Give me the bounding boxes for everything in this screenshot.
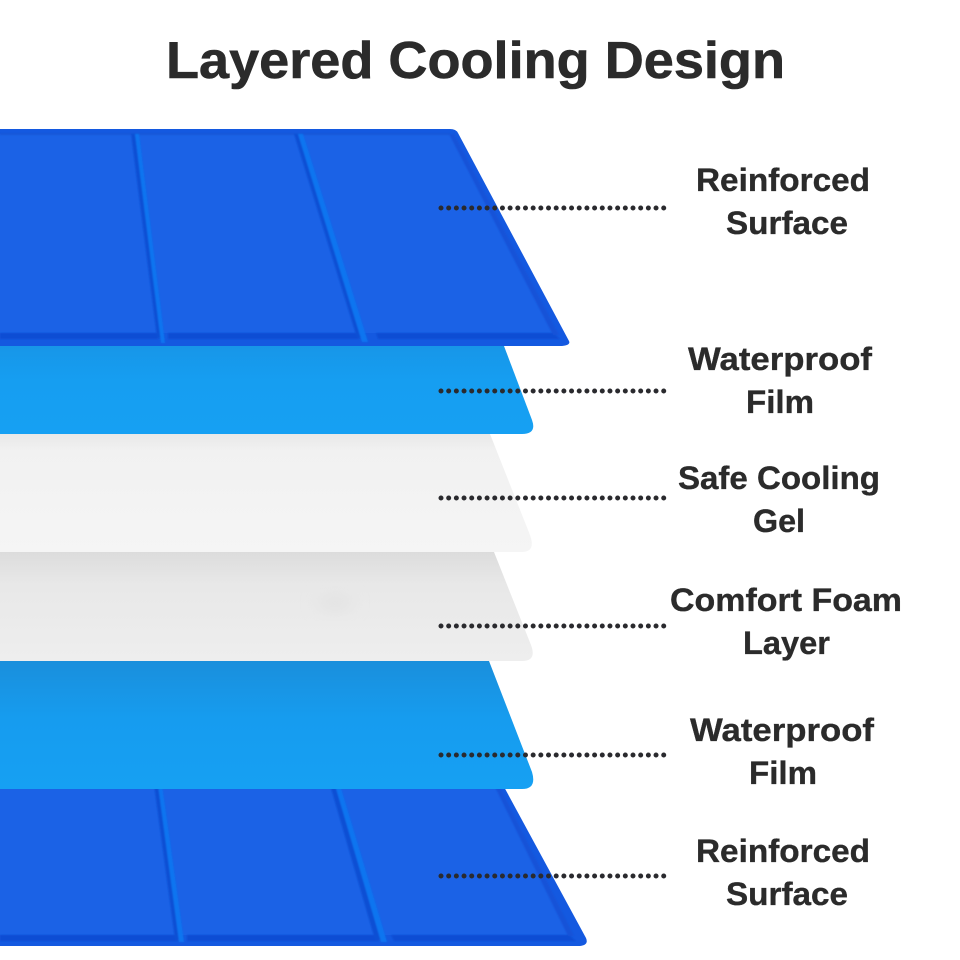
label: safe cooling gel: Safe Cooling (678, 460, 880, 496)
leader line: comfort foam (441, 624, 664, 628)
leader line: reinforced surface bottom (441, 874, 664, 878)
label: reinforced surface top: Reinforced (696, 162, 870, 198)
layer: upper waterproof film (0, 346, 533, 434)
layer: comfort foam (0, 552, 533, 661)
layer: bottom reinforced surface (0, 785, 587, 946)
label: safe cooling gel: Gel (753, 503, 805, 539)
label: comfort foam: Comfort Foam (670, 582, 902, 618)
leader line: reinforced surface top (441, 206, 664, 210)
label: reinforced surface bottom: Surface (726, 876, 848, 912)
label: reinforced surface top: Surface (726, 205, 848, 241)
leader line: waterproof film upper (441, 388, 664, 394)
title: Layered Cooling Design (166, 32, 785, 90)
layer: safe cooling gel (0, 434, 532, 552)
label: waterproof film lower: Film (749, 755, 817, 791)
layer: top reinforced surface (0, 129, 569, 346)
layer: lower waterproof film (0, 661, 533, 789)
leader line: waterproof film lower (441, 752, 664, 758)
label: comfort foam: Layer (743, 625, 830, 661)
label: waterproof film lower: Waterproof (690, 712, 874, 748)
label: waterproof film upper: Film (746, 384, 814, 420)
label: reinforced surface bottom: Reinforced (696, 833, 870, 869)
leader line: safe cooling gel (441, 496, 664, 500)
label: waterproof film upper: Waterproof (688, 341, 872, 377)
